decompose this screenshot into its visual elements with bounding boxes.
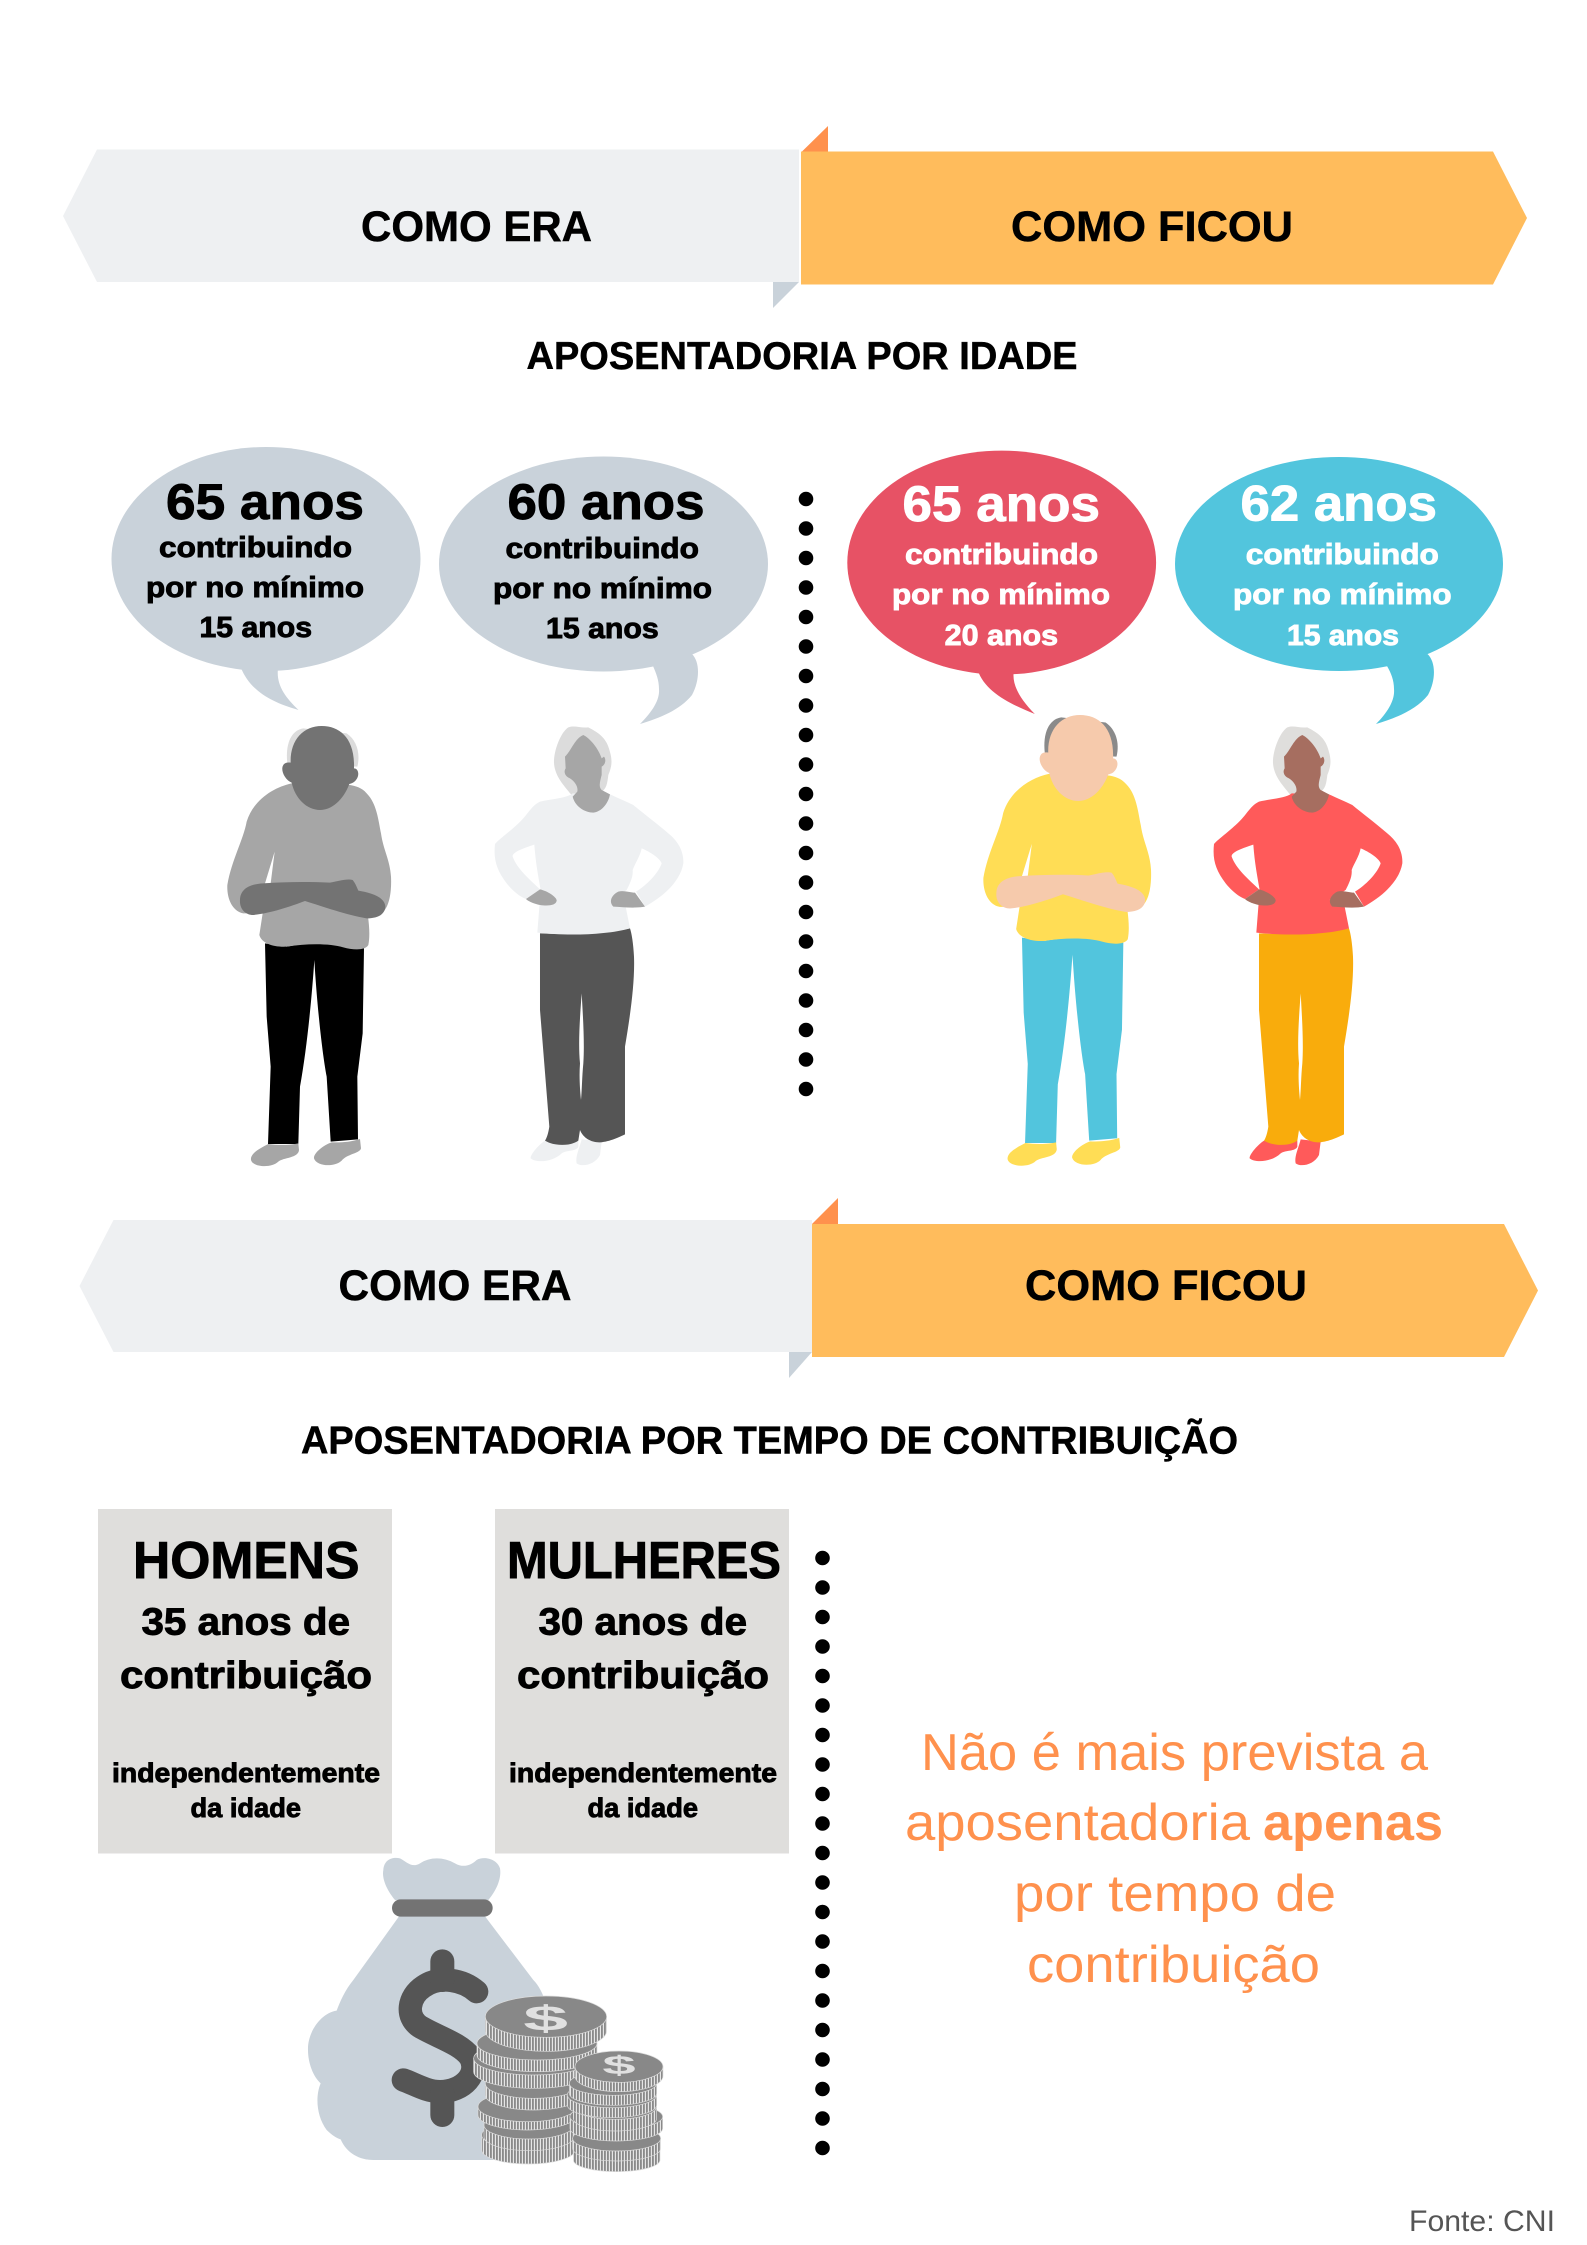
speech bubble: mulher antes (439, 456, 768, 724)
callout: não é mais prevista: por tempo de (1014, 1865, 1336, 1923)
panel: mulheres: independentemente (509, 1758, 777, 1788)
icon: money bag (308, 1858, 547, 2160)
panel: homens: 35 anos de (142, 1602, 350, 1644)
panel: mulheres (495, 1509, 789, 1854)
icon: small coin stack (567, 2051, 663, 2172)
panel: mulheres: contribuição (517, 1655, 769, 1697)
speech bubble: mulher depois: contribuindo (1246, 539, 1439, 571)
speech bubble: homem antes: por no mínimo (146, 572, 364, 604)
panel: homens (98, 1509, 392, 1854)
banner: como ficou (idade): COMO FICOU (1011, 203, 1293, 251)
speech bubble: mulher depois: 15 anos (1287, 620, 1399, 652)
callout: não é mais prevista: Não é mais prevista a (921, 1724, 1428, 1782)
banner: como ficou (idade) (801, 126, 1527, 284)
speech bubble: homem depois: por no mínimo (892, 579, 1110, 611)
banner: como ficou (contribuição) (812, 1198, 1538, 1357)
panel: mulheres: da idade (588, 1793, 698, 1823)
figure: mulher colorida (1214, 726, 1402, 1165)
panel: homens: independentemente (112, 1758, 380, 1788)
speech bubble: homem antes (112, 447, 420, 710)
figure: homem cinza (227, 726, 391, 1166)
icon: money bag and coins (308, 1858, 663, 2172)
icon: small coin dollar sign: $ (602, 2050, 636, 2080)
heading: aposentadoria por tempo de contribuição: APOSENTADORIA POR TEMPO DE CONTRIBUIÇÃO (301, 1418, 1238, 1462)
banner: como ficou (contribuição): COMO FICOU (1025, 1262, 1307, 1310)
icon: coin dollar sign: $ (523, 2000, 568, 2039)
callout: não é mais prevista (905, 1724, 1443, 1994)
banner: como era (idade): COMO ERA (361, 203, 592, 251)
speech bubble: homem antes: contribuindo (159, 532, 352, 564)
callout: não é mais prevista: contribuição (1027, 1936, 1320, 1994)
speech bubble: mulher antes: 60 anos (508, 474, 704, 530)
dotted divider: idade (799, 499, 813, 1092)
panel: homens: HOMENS (133, 1532, 360, 1590)
speech bubble: homem depois (847, 451, 1156, 714)
speech bubble: mulher depois (1175, 457, 1503, 724)
panel: mulheres: 30 anos de (538, 1602, 747, 1644)
icon: large coin stack (474, 1996, 607, 2164)
speech bubble: mulher antes: por no mínimo (493, 573, 712, 605)
callout: não é mais prevista: apenas (1263, 1794, 1443, 1852)
callout: não é mais prevista: aposentadoria (905, 1794, 1250, 1852)
speech bubble: homem depois: contribuindo (905, 539, 1098, 571)
figure: mulher cinza (495, 726, 683, 1165)
speech bubble: mulher depois: por no mínimo (1233, 579, 1452, 611)
heading: aposentadoria por idade: APOSENTADORIA POR IDADE (526, 335, 1078, 378)
speech bubble: homem depois: 65 anos (902, 476, 1100, 532)
figure: homem colorido (983, 715, 1151, 1166)
banner: como era (contribuição) (80, 1220, 812, 1378)
speech bubble: mulher depois: 62 anos (1240, 476, 1437, 532)
speech bubble: mulher antes: contribuindo (506, 533, 699, 565)
speech bubble: homem depois: 20 anos (945, 620, 1058, 652)
banner: como era (idade) (63, 150, 799, 308)
speech bubble: homem antes: 15 anos (200, 612, 312, 644)
speech bubble: mulher antes: 15 anos (546, 613, 659, 645)
dotted divider: contribuição (815, 1558, 830, 2151)
source note: Fonte: CNI (1409, 2205, 1555, 2238)
banner: como era (contribuição): COMO ERA (338, 1262, 572, 1310)
panel: mulheres: MULHERES (507, 1532, 781, 1590)
speech bubble: homem antes: 65 anos (166, 474, 364, 530)
panel: homens: contribuição (120, 1655, 372, 1697)
panel: homens: da idade (190, 1793, 301, 1823)
